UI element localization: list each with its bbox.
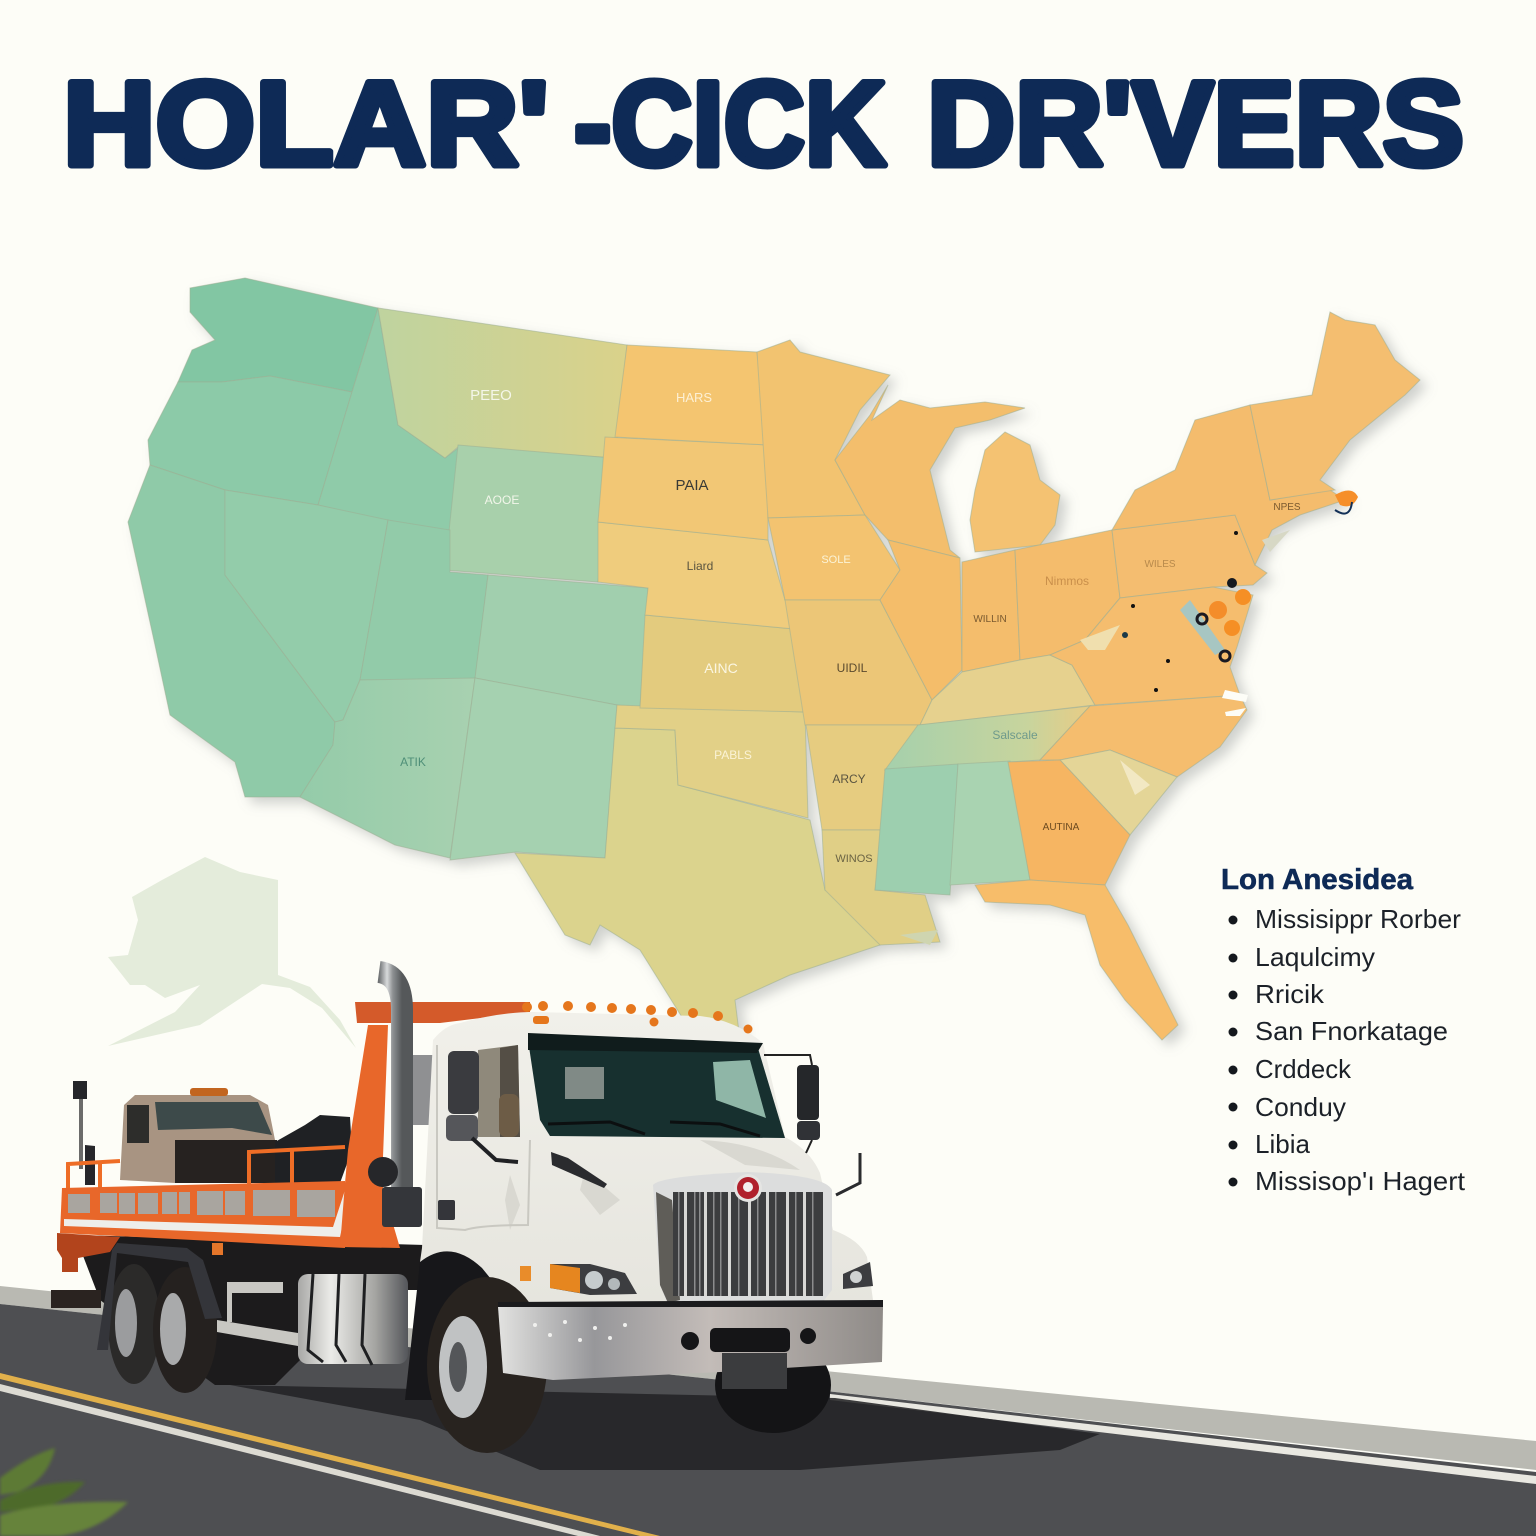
map: state labels: WILES — [1144, 559, 1176, 570]
legend items: Libia — [1255, 1129, 1311, 1159]
state: Colorado — [475, 575, 648, 708]
state: Montana — [378, 308, 627, 458]
title: -CICK — [574, 57, 886, 191]
windshield wipers — [548, 1122, 760, 1136]
grille fine bars — [678, 1192, 814, 1296]
state: Nebraska — [598, 522, 805, 630]
state: North Dakota — [615, 345, 768, 445]
white road line — [0, 1384, 600, 1536]
state: Georgia — [1008, 760, 1130, 885]
map: state labels: ATIK — [400, 755, 426, 769]
state: Idaho — [318, 308, 462, 540]
step — [217, 1282, 298, 1346]
licence plate — [722, 1353, 787, 1389]
cab body — [420, 1012, 873, 1303]
right mirror — [764, 1055, 820, 1153]
state: Nevada — [225, 490, 388, 722]
yellow centre line — [0, 1373, 660, 1536]
state: North Carolina — [1040, 695, 1247, 777]
windshield sun panels — [565, 1060, 766, 1118]
carried truck beacon — [190, 1088, 228, 1096]
carried truck — [120, 1088, 352, 1183]
legend items — [1255, 904, 1466, 1196]
legend items: San Fnorkatage — [1255, 1016, 1448, 1046]
legend items: Crddeck — [1255, 1054, 1352, 1084]
top crossbar — [355, 1002, 530, 1023]
rear orange bracket — [57, 1233, 120, 1272]
map: state labels: PAIA — [675, 477, 709, 494]
rear fender — [97, 1243, 222, 1350]
exhaust stack — [379, 972, 402, 1190]
far front tyre — [715, 1337, 831, 1433]
map: state labels: Liard — [687, 559, 713, 573]
under-hood gap — [498, 1300, 883, 1312]
windshield visor — [528, 1033, 763, 1053]
left mirror — [446, 1051, 518, 1162]
map: state labels: PEEO — [470, 387, 512, 404]
legend bullets — [1228, 916, 1238, 1186]
state: New England — [1250, 312, 1420, 500]
map: state labels: WILLIN — [973, 614, 1007, 625]
door seam — [437, 1045, 530, 1230]
map: Alaska inset — [108, 857, 356, 1048]
map: state labels: AUTINA — [1043, 822, 1080, 833]
tow truck — [51, 972, 883, 1453]
state: California — [128, 465, 335, 797]
state: Alabama — [950, 761, 1030, 885]
state: Ohio — [1015, 530, 1120, 660]
curb — [0, 1286, 1536, 1470]
map: state labels: AINC — [704, 660, 738, 676]
safety rail — [68, 1147, 345, 1190]
title: DR'VERS — [927, 57, 1464, 191]
map: state labels: AOOE — [485, 493, 519, 507]
turn marker — [520, 1266, 531, 1281]
map: state labels: ARCY — [832, 772, 866, 786]
state: Pennsylvania — [1112, 515, 1267, 598]
map: state labels: UIDIL — [837, 661, 868, 675]
carried truck grille — [175, 1140, 277, 1183]
antenna bracket — [836, 1153, 860, 1195]
front tyre — [427, 1277, 547, 1453]
road — [0, 1286, 1536, 1536]
flatbed deck — [60, 1181, 345, 1248]
state: Kansas — [640, 615, 805, 712]
foreground bush — [0, 1448, 128, 1536]
windshield — [528, 1040, 785, 1138]
legend items: Laqulcimy — [1255, 942, 1375, 972]
state: Wyoming — [445, 445, 612, 582]
grille surround — [653, 1172, 832, 1305]
amber side marker — [212, 1243, 223, 1255]
left headlight — [550, 1264, 637, 1295]
rear bumper — [51, 1290, 101, 1308]
grille badge — [734, 1174, 762, 1202]
map: state labels: SOLE — [821, 554, 851, 566]
state: Minnesota — [757, 340, 890, 518]
legend items: Rricik — [1255, 979, 1325, 1009]
carried truck cab — [120, 1095, 275, 1183]
state: Arkansas — [806, 725, 918, 830]
carried truck side window — [127, 1105, 149, 1143]
exhaust clamp — [368, 1157, 398, 1187]
map: state labels: HARS — [676, 390, 712, 405]
state: Tennessee — [885, 706, 1090, 770]
deck white stripe — [64, 1190, 350, 1237]
state: Virginias — [1050, 587, 1253, 705]
grille bars — [684, 1192, 806, 1296]
legend items: Missisippr Rorber — [1255, 904, 1461, 934]
state: Indiana — [962, 550, 1020, 672]
map: east coast specks — [900, 490, 1358, 945]
state: Utah — [360, 520, 488, 680]
hood vent — [551, 1152, 607, 1188]
title — [63, 57, 1464, 191]
deck side panels — [68, 1190, 335, 1217]
grille left chrome edge — [656, 1192, 680, 1303]
state: Arizona — [300, 678, 475, 858]
state: Kentucky — [920, 655, 1095, 725]
front bumper — [498, 1307, 883, 1380]
legend heading: Lon Anesidea — [1221, 864, 1414, 896]
map: state labels: Nimmos — [1045, 574, 1089, 588]
engine machinery — [275, 1115, 352, 1183]
exhaust base — [382, 1187, 422, 1227]
state: Louisiana — [822, 830, 940, 945]
state: Wisconsin and Upper Michigan — [835, 385, 1025, 558]
front wheel arch — [405, 1251, 512, 1400]
state: Mississippi — [875, 764, 958, 895]
hood shading — [505, 1140, 800, 1230]
truck shadow — [230, 1385, 1100, 1470]
grille — [673, 1192, 823, 1296]
state: Iowa — [768, 515, 900, 600]
grey cab back box — [410, 1055, 435, 1125]
carried truck windscreen — [155, 1102, 272, 1135]
state: New York — [1112, 405, 1345, 565]
map: state labels: Salscale — [992, 728, 1038, 742]
state: Missouri — [785, 600, 932, 725]
right headlight — [843, 1262, 873, 1289]
asphalt — [0, 1304, 1536, 1536]
fuel tank — [298, 1274, 408, 1365]
rear tyre two — [153, 1267, 217, 1393]
white edge line — [830, 1394, 1536, 1484]
state: Lower Michigan — [970, 432, 1060, 552]
state: Texas — [515, 728, 880, 1040]
state: South Carolina — [1060, 750, 1177, 835]
map: state labels — [400, 387, 1301, 865]
legend items: Conduy — [1255, 1092, 1346, 1122]
state: New Mexico — [450, 678, 617, 860]
map: state labels: NPES — [1273, 502, 1301, 513]
state: Oregon — [148, 376, 352, 505]
state: South Dakota — [598, 437, 768, 540]
state: Illinois — [880, 540, 962, 700]
map: contiguous United States — [128, 278, 1420, 1040]
rear lamp post — [73, 1081, 95, 1185]
map: state labels: WINOS — [835, 853, 873, 865]
state: Washington — [178, 278, 378, 392]
bumper fog holes — [681, 1328, 816, 1352]
state: Oklahoma — [615, 705, 808, 818]
map: state labels: PABLS — [714, 748, 752, 762]
bumper dimples — [533, 1320, 627, 1342]
rear underbody — [75, 1235, 425, 1385]
legend — [1221, 864, 1466, 1196]
headboard — [340, 1025, 400, 1248]
roof marker lights — [522, 1001, 752, 1034]
state: Florida — [975, 880, 1178, 1040]
legend items: Missisop'ı Hagert — [1255, 1166, 1466, 1196]
rear tyre one — [108, 1264, 160, 1384]
side window — [478, 1045, 520, 1137]
door handle — [438, 1200, 455, 1220]
title: HOLAR' — [63, 57, 549, 191]
